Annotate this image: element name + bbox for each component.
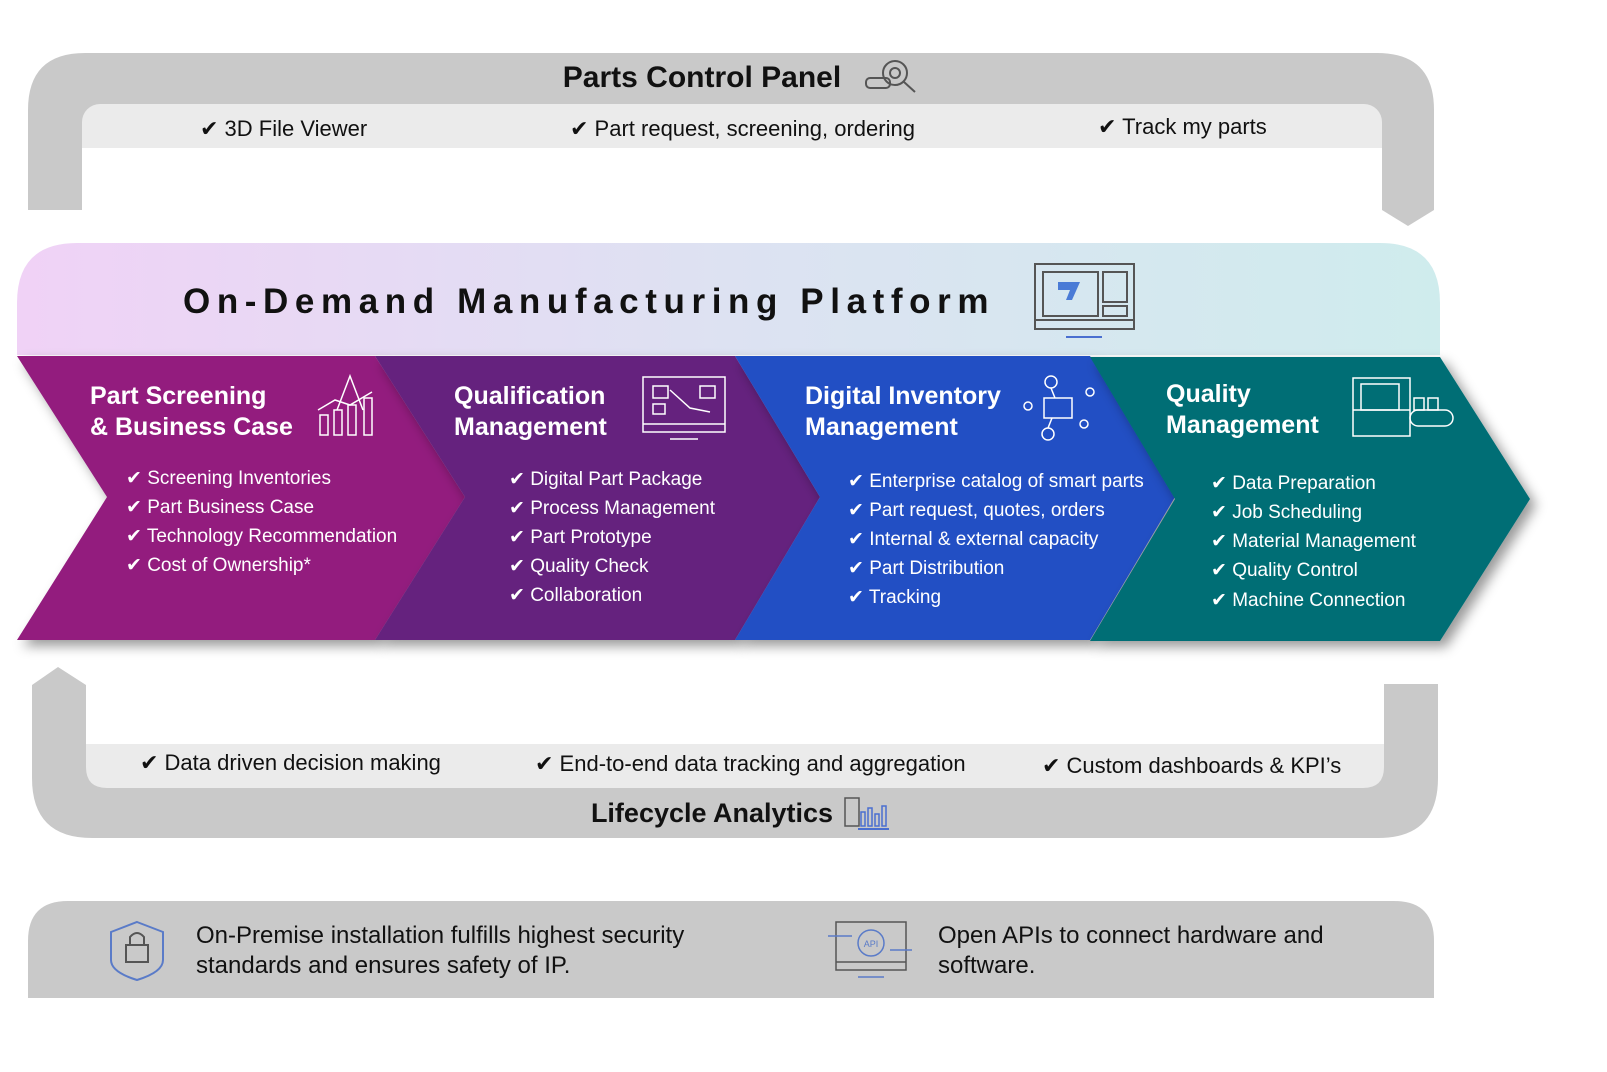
- panel: lifecycle analytics: [32, 667, 1438, 838]
- text: analytics items: ✔ End-to-end data tracking and aggregation: [535, 751, 966, 776]
- text: analytics items: ✔ Data driven decision making: [140, 750, 441, 775]
- chevron: quality management: Management: [1166, 411, 1319, 439]
- icon: API: [828, 922, 912, 977]
- chevron: qualification management: ✔ Quality Check: [509, 556, 649, 577]
- icon: network: [1024, 376, 1094, 440]
- icon: monitor with logo: [1035, 264, 1134, 337]
- text: feature items: ✔ 3D File Viewer: [200, 116, 367, 141]
- chevron: qualification management: ✔ Digital Part Package: [509, 469, 702, 490]
- chevron: quality management: ✔ Data Preparation: [1211, 473, 1376, 494]
- chevron: digital inventory management: ✔ Enterprise catalog of smart parts: [848, 471, 1144, 492]
- text: open APIs: software.: [938, 952, 1035, 979]
- panel: platform banner: [17, 243, 1440, 355]
- chevron: quality management: ✔ Machine Connection: [1211, 590, 1405, 611]
- chevron: part screening: ✔ Screening Inventories: [126, 468, 331, 489]
- chevron: digital inventory management: Management: [805, 413, 958, 441]
- text: security: On-Premise installation fulfills highest security: [196, 922, 684, 949]
- text: security: standards and ensures safety of IP.: [196, 952, 570, 979]
- icon: parts search: [866, 61, 915, 92]
- chevron: digital inventory management: ✔ Part request, quotes, orders: [848, 500, 1105, 521]
- chevron: digital inventory management: Digital Inventory: [805, 382, 1001, 410]
- text: feature items: ✔ Part request, screening, ordering: [570, 116, 915, 141]
- icon: production line: [1353, 378, 1453, 436]
- text: analytics items: ✔ Custom dashboards & KPI’s: [1042, 753, 1341, 778]
- chevron: part screening: Part Screening: [90, 382, 266, 410]
- icon: analytics: [845, 798, 889, 829]
- chevron: part screening: & Business Case: [90, 413, 293, 441]
- text: feature items: [200, 114, 1267, 141]
- chevron: qualification management: Management: [454, 413, 607, 441]
- chevron: digital inventory management: ✔ Part Distribution: [848, 558, 1004, 579]
- chevron: part screening: ✔ Cost of Ownership*: [126, 555, 311, 576]
- icon: API: API: [864, 939, 878, 949]
- icon: growth chart: [318, 376, 372, 435]
- chevron: qualification management: [375, 356, 820, 640]
- chevron: part screening: ✔ Part Business Case: [126, 497, 314, 518]
- chevron: quality management: ✔ Material Management: [1211, 531, 1417, 552]
- text: open APIs: Open APIs to connect hardware and: [938, 922, 1324, 949]
- icon: circuit monitor: [643, 377, 725, 439]
- panel: bottom features: [28, 901, 1434, 998]
- chevron: digital inventory management: [735, 356, 1175, 640]
- chevron: qualification management: ✔ Collaboration: [509, 585, 642, 606]
- text: open APIs: [938, 922, 1324, 979]
- chevron: digital inventory management: ✔ Tracking: [848, 587, 941, 608]
- heading: parts control panel: Parts Control Panel: [563, 61, 841, 94]
- text: analytics items: [140, 750, 1341, 778]
- text: feature items: ✔ Track my parts: [1098, 114, 1267, 139]
- text: security: [196, 922, 684, 979]
- chevron: qualification management: ✔ Part Prototype: [509, 527, 652, 548]
- chevron: quality management: [1090, 357, 1530, 641]
- chevron: qualification management: Qualification: [454, 382, 605, 410]
- chevron: part screening: ✔ Technology Recommendation: [126, 526, 397, 547]
- chevron: quality management: Quality: [1166, 380, 1251, 408]
- heading: platform title: On-Demand Manufacturing Platform: [183, 282, 995, 321]
- panel: parts control panel: [28, 53, 1434, 226]
- chevron: quality management: ✔ Quality Control: [1211, 560, 1358, 581]
- heading: lifecycle analytics: Lifecycle Analytics: [591, 798, 833, 828]
- chevron: digital inventory management: ✔ Internal & external capacity: [848, 529, 1099, 550]
- chevron: part screening: [17, 356, 465, 640]
- chevron: qualification management: ✔ Process Management: [509, 498, 716, 519]
- icon: security shield: [111, 922, 163, 980]
- chevron: quality management: ✔ Job Scheduling: [1211, 502, 1362, 523]
